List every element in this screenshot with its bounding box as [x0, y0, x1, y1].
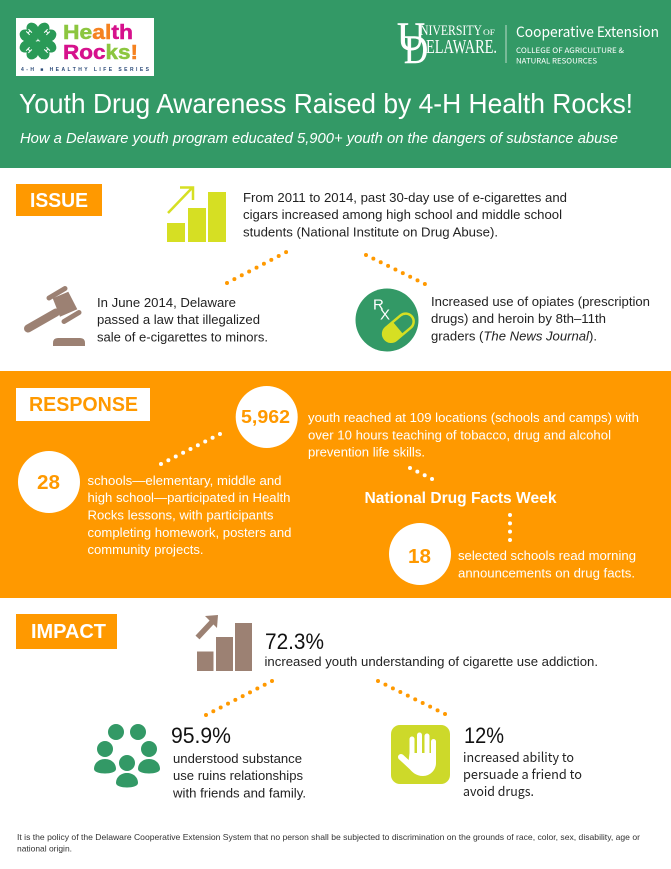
stat: 12%: persuade a friend to	[463, 764, 582, 783]
stat circle: 18	[389, 523, 451, 585]
logo: 4-H Health Rocks: H	[43, 46, 52, 55]
heading: issue	[16, 184, 102, 216]
logo: Cooperative Extension: NATURAL RESOURCES	[516, 56, 598, 66]
stat circle: 28: 28	[37, 472, 60, 494]
logo: 4-H Health Rocks: Health	[63, 22, 133, 44]
text: schools participated: Rocks lessons, with participants	[88, 508, 274, 522]
logo: University of Delaware: NIVERSITY	[420, 23, 482, 39]
stat: 72.3%: increased youth understanding of cigarette use addiction.	[264, 654, 598, 669]
footer: nondiscrimination policy: national origin.	[17, 844, 72, 854]
text: opiates: drugs) and heroin by 8th–11th	[431, 311, 606, 326]
subheading: National Drug Facts Week: National Drug Facts Week	[364, 490, 557, 507]
panel: response	[0, 371, 671, 598]
text: Delaware law: sale of e-cigarettes to minors.	[97, 330, 268, 344]
text: e-cigarette use: From 2011 to 2014, past 30-day use of e-cigarettes and	[243, 190, 567, 205]
dotted connector to 28	[161, 434, 220, 464]
text: e-cigarette use: students (National Institute on Drug Abuse).	[243, 224, 498, 240]
text: e-cigarette use: cigars increased among high school and middle school	[243, 207, 562, 222]
panel: issue	[16, 184, 650, 352]
text: morning announcements: announcements on drug facts.	[458, 566, 635, 580]
stat: 12%: avoid drugs.	[463, 781, 534, 800]
text: schools participated: community projects.	[88, 542, 204, 557]
logo: University of Delaware	[397, 14, 497, 72]
text: schools participated	[88, 473, 292, 557]
text: Delaware law: In June 2014, Delaware	[97, 295, 236, 310]
text: e-cigarette use	[243, 190, 567, 240]
panel: impact	[16, 614, 598, 800]
dotted connector left	[227, 252, 286, 283]
icon: raised hand	[391, 725, 450, 784]
icon: gavel	[28, 288, 85, 346]
icon: prescription pill	[356, 288, 418, 352]
stat: 95.9%: use ruins relationships	[173, 768, 303, 783]
text: youth reached	[308, 410, 639, 460]
icon: rising bar chart	[167, 188, 226, 242]
text: schools participated: high school—participated in Health	[88, 490, 290, 505]
stat: 95.9%: understood substance	[173, 751, 302, 766]
icon: brown bar chart	[197, 615, 252, 671]
text: opiates: Increased use of opiates (prescription	[431, 294, 650, 309]
text: youth reached: youth reached at 109 locations (schools and camps) with	[308, 410, 639, 425]
heading: impact: IMPACT	[31, 621, 106, 643]
stat circle: 5,962	[236, 386, 298, 448]
text: Delaware law	[97, 295, 268, 344]
dotted connector right	[366, 255, 425, 284]
dotted connector to drug facts week	[410, 468, 432, 479]
logo: 4-H Health Rocks: 4-H ■ HEALTHY LIFE SERIES	[21, 67, 150, 73]
title: Youth Drug Awareness Raised by 4-H Health Rocks!	[19, 88, 633, 119]
stat: 12%: increased ability to	[463, 747, 574, 766]
text: youth reached: prevention life skills.	[308, 444, 425, 460]
stat: 12%: 12%	[464, 723, 504, 748]
footer: nondiscrimination policy	[17, 832, 640, 854]
logo: Cooperative Extension: Cooperative Extension	[516, 21, 659, 42]
text: Delaware law: passed a law that illegalized	[97, 312, 260, 327]
logo: University of Delaware: D	[404, 27, 428, 72]
icon: prescription pill: R	[373, 296, 384, 314]
dotted connector left	[206, 681, 272, 715]
text: morning announcements	[458, 548, 636, 580]
logo: University of Delaware: OF	[483, 28, 496, 37]
text: opiates	[431, 294, 650, 344]
text: youth reached: over 10 hours teaching of tobacco, drug and alcohol	[308, 428, 611, 442]
heading: response	[16, 388, 150, 421]
stat: 95.9%	[171, 723, 306, 800]
stat: 12%	[463, 723, 582, 800]
heading: response: RESPONSE	[29, 394, 138, 416]
stat: 72.3%	[264, 629, 598, 669]
header banner	[0, 0, 671, 168]
logo: 4-H Health Rocks	[16, 18, 154, 76]
text: morning announcements: selected schools read morning	[458, 548, 636, 563]
text: schools participated: completing homework, posters and	[88, 525, 292, 540]
stat: 95.9%: with friends and family.	[172, 786, 306, 800]
logo: 4-H Health Rocks: Rocks!	[63, 42, 138, 64]
heading: impact	[16, 614, 117, 649]
footer: nondiscrimination policy: It is the policy of the Delaware Cooperative Extension System that no person shall be subjected to discrimination on the grounds of race, color, sex, disability, age or	[17, 832, 640, 842]
logo: University of Delaware: ELAWARE.	[426, 36, 497, 58]
subtitle: How a Delaware youth program educated 5,900+ youth on the dangers of substance abuse	[20, 130, 618, 147]
logo: 4-H Health Rocks: H	[25, 28, 34, 37]
stat circle: 28	[18, 451, 80, 513]
logo: 4-H Health Rocks: H	[24, 46, 33, 55]
icon: prescription pill: X	[380, 306, 390, 324]
heading: issue: ISSUE	[30, 190, 88, 212]
text: opiates: graders (The News Journal).	[431, 328, 597, 344]
stat: 72.3%: 72.3%	[265, 629, 324, 654]
stat circle: 5,962: 5,962	[241, 406, 290, 427]
logo: Cooperative Extension	[506, 21, 659, 66]
text: schools participated: schools—elementary, middle and	[88, 473, 282, 488]
stat: 95.9%: 95.9%	[171, 723, 231, 748]
logo: Cooperative Extension: COLLEGE OF AGRICULTURE &	[516, 45, 624, 56]
icon: group of people	[94, 724, 160, 788]
dotted connector right	[378, 681, 445, 714]
dotted connector vertical	[508, 515, 512, 540]
stat circle: 18: 18	[408, 546, 431, 568]
logo: 4-H Health Rocks: H	[42, 28, 51, 37]
logo: University of Delaware: U	[397, 14, 425, 59]
